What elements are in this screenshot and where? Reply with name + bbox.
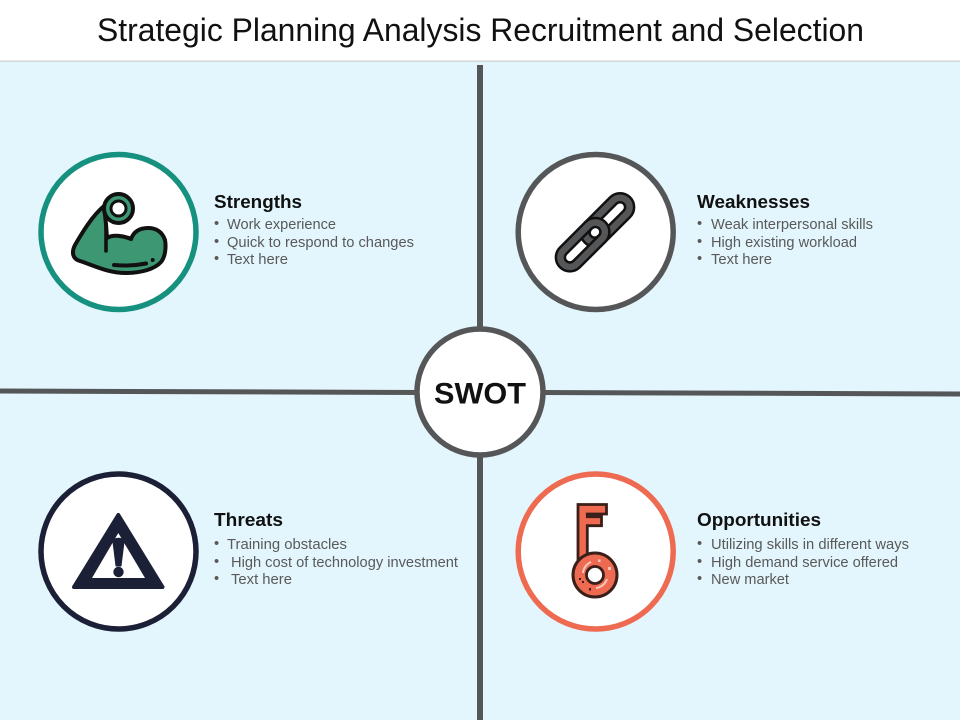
opportunities bullets: New market: [711, 572, 789, 588]
strengths bullets: [214, 216, 414, 268]
weaknesses bullets: Text here: [711, 252, 772, 268]
weaknesses bullets: •: [697, 234, 702, 250]
threats bullets: •: [214, 536, 219, 552]
threats bullets: [214, 536, 458, 588]
opportunities bullets: Utilizing skills in different ways: [711, 537, 909, 553]
threats heading: Threats: [214, 509, 283, 530]
threats bullets: High cost of technology investment: [231, 555, 458, 571]
weaknesses heading: Weaknesses: [697, 191, 810, 212]
opportunities bullets: •: [697, 571, 702, 587]
threats bullets: •: [214, 554, 219, 570]
weaknesses bullets: •: [697, 251, 702, 267]
opportunities bullets: •: [697, 554, 702, 570]
weaknesses bullets: High existing workload: [711, 235, 857, 251]
strengths bullets: Quick to respond to changes: [227, 235, 414, 251]
weaknesses bullets: [697, 216, 873, 268]
threats bullets: Text here: [231, 572, 292, 588]
strengths bullets: Text here: [227, 252, 288, 268]
opportunities bullets: [697, 536, 909, 588]
threats bullets: •: [214, 571, 219, 587]
threats icon: warning triangle: [41, 474, 196, 629]
center SWOT hub: SWOT: [434, 378, 526, 410]
strengths icon: flexed arm with ring: [41, 154, 196, 310]
opportunities icon: key: [518, 474, 673, 629]
strengths bullets: •: [214, 234, 219, 250]
weaknesses bullets: Weak interpersonal skills: [711, 217, 873, 233]
opportunities heading: Opportunities: [697, 509, 821, 530]
strengths bullets: •: [214, 251, 219, 267]
panel: weaknesses: [518, 154, 873, 310]
weaknesses icon: chain link: [518, 154, 673, 310]
weaknesses bullets: •: [697, 216, 702, 232]
threats bullets: Training obstacles: [227, 537, 347, 553]
strengths bullets: Work experience: [227, 217, 336, 233]
strengths bullets: •: [214, 216, 219, 232]
title: Strategic Planning Analysis Recruitment and Selection: [97, 12, 864, 48]
center SWOT hub: [417, 329, 543, 455]
opportunities bullets: •: [697, 536, 702, 552]
strengths heading: Strengths: [214, 191, 302, 212]
opportunities bullets: High demand service offered: [711, 555, 898, 571]
panel: strengths: [41, 154, 414, 310]
panel: threats: [41, 474, 458, 629]
panel: opportunities: [518, 474, 909, 629]
